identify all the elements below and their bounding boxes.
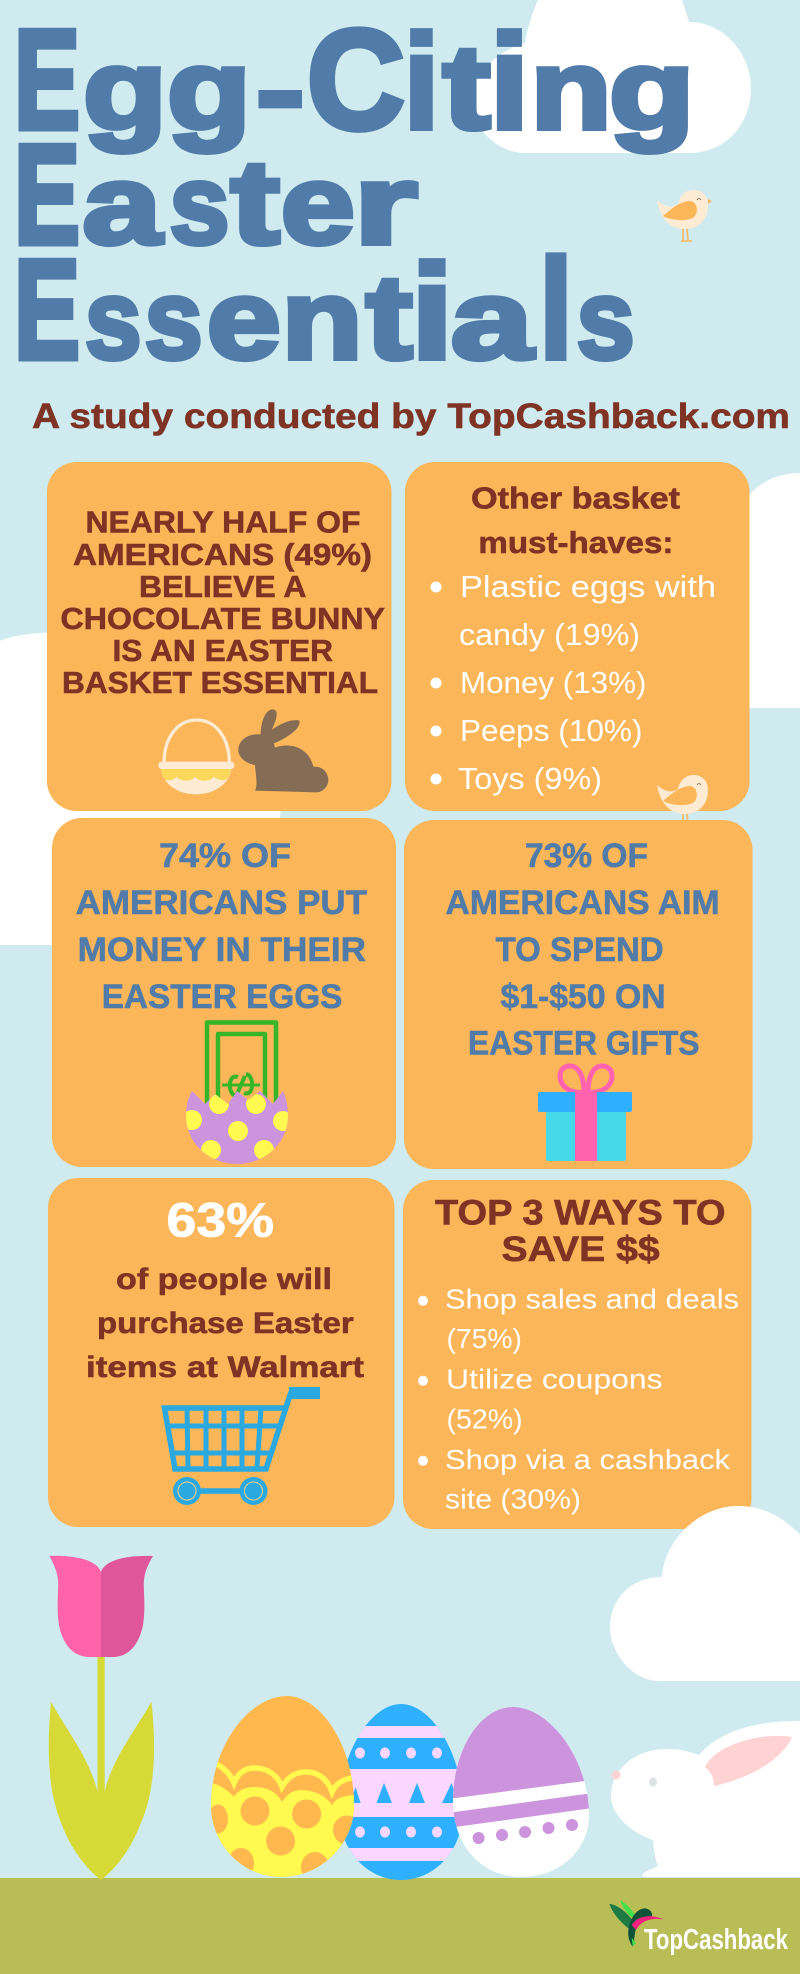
text: chocolate bunny statistic [60,506,385,700]
title: e [281,142,355,268]
title: E [14,230,80,390]
title: a [82,142,163,268]
panel: walmart [48,1178,394,1527]
text: walmart statistic: items at Walmart [86,1351,364,1384]
title: E [14,0,80,160]
icon: hummingbird [609,1901,664,1947]
title: t [366,250,413,384]
title: s [85,256,142,382]
text: gift spend statistic: EASTER GIFTS [468,1025,700,1063]
list: ways to save: (52%) [446,1404,523,1435]
icon: shopping cart [164,1387,320,1505]
text: chocolate bunny statistic: CHOCOLATE BUNNY [60,602,385,636]
text: chocolate bunny statistic: BASKET ESSENTIAL [62,666,378,700]
panel: chocolate bunny [47,462,392,811]
ground [0,1878,800,1974]
heading: other basket must-haves: must-haves: [478,525,673,560]
list: basket items: candy (19%) [459,617,640,652]
panel: ways to save [403,1180,752,1529]
title: g [609,26,695,152]
icon: chick top [657,190,712,241]
text: money statistic: AMERICANS PUT [76,884,367,922]
icon: orange egg [211,1696,354,1877]
list: ways to save [418,1284,739,1515]
list: ways to save: site (30%) [445,1484,581,1515]
title: s [577,256,635,382]
icon: gift box [538,1066,632,1161]
text: money statistic: MONEY IN THEIR [78,931,366,969]
title: s [170,142,230,268]
icon: white bunny [611,1721,800,1877]
panel: money in eggs [52,818,396,1170]
icon: purple egg [453,1707,589,1877]
text: gift spend statistic: TO SPEND [496,931,664,969]
text: gift spend statistic: $1-$50 ON [500,978,666,1016]
title: E [14,116,80,274]
text: 63 percent: 63% [166,1195,274,1248]
text: money statistic: EASTER EGGS [102,978,342,1016]
list: basket items: Peeps (10%) [460,713,642,748]
title: - [256,26,305,152]
text: walmart statistic: of people will [116,1263,332,1296]
title: a [451,256,534,382]
heading: top 3 ways to save [435,1193,726,1269]
text: chocolate bunny statistic: NEARLY HALF OF [86,506,360,540]
cloud: top right [470,0,751,153]
text: walmart statistic: purchase Easter [97,1307,354,1340]
title: i [411,236,454,388]
text: gift spend statistic: 73% OF [525,837,648,875]
panel: other basket must-haves [405,462,750,811]
list: ways to save: Shop sales and deals [445,1284,739,1315]
heading: other basket must-haves [471,481,680,560]
heading: top 3 ways to save: SAVE $$ [502,1230,660,1269]
title: C [307,0,405,160]
title: i [404,6,440,158]
list: basket items: Money (13%) [460,665,646,700]
text: walmart statistic [86,1263,364,1384]
heading: top 3 ways to save: TOP 3 WAYS TO [435,1193,726,1232]
list: ways to save: Utilize coupons [446,1364,663,1395]
text: gift spend statistic [446,837,720,1063]
heading: other basket must-haves: Other basket [471,481,680,516]
text: money statistic [76,837,367,1016]
cloud: middle right [735,473,800,708]
title: r [354,142,418,268]
title: gg [83,26,251,152]
icon: chocolate bunny [238,709,328,792]
text: chocolate bunny statistic: BELIEVE A [139,570,306,604]
text: money statistic: 74% OF [159,837,291,875]
title: n [282,256,363,382]
list: basket items: Toys (9%) [458,761,602,796]
icon: tulip [49,1556,154,1880]
logo: TopCashback [609,1901,789,1956]
list: ways to save: Shop via a cashback [445,1444,731,1475]
icon: blue egg [344,1704,460,1880]
text: gift spend statistic: AMERICANS AIM [446,884,720,922]
icon: chick on panel [657,775,708,826]
title: e [207,256,281,382]
list: basket items: Plastic eggs with [460,569,716,604]
cloud: bottom right [610,1506,800,1681]
cloud: middle left [0,632,281,945]
panel: easter gift spend [404,820,752,1169]
title: s [145,256,203,382]
title: t [443,20,491,154]
text: chocolate bunny statistic: AMERICANS (49%) [73,538,372,572]
text: chocolate bunny statistic: IS AN EASTER [112,634,333,668]
title: t [230,136,280,270]
subtitle: A study conducted by TopCashback.com [32,397,790,436]
title: n [531,26,612,152]
title: l [539,230,573,390]
list: ways to save: (75%) [446,1323,522,1354]
title: i [490,6,530,158]
icon: basket [158,720,234,794]
title [14,0,695,390]
list: basket items [430,569,716,796]
icon: money in cracked egg [186,1020,288,1164]
